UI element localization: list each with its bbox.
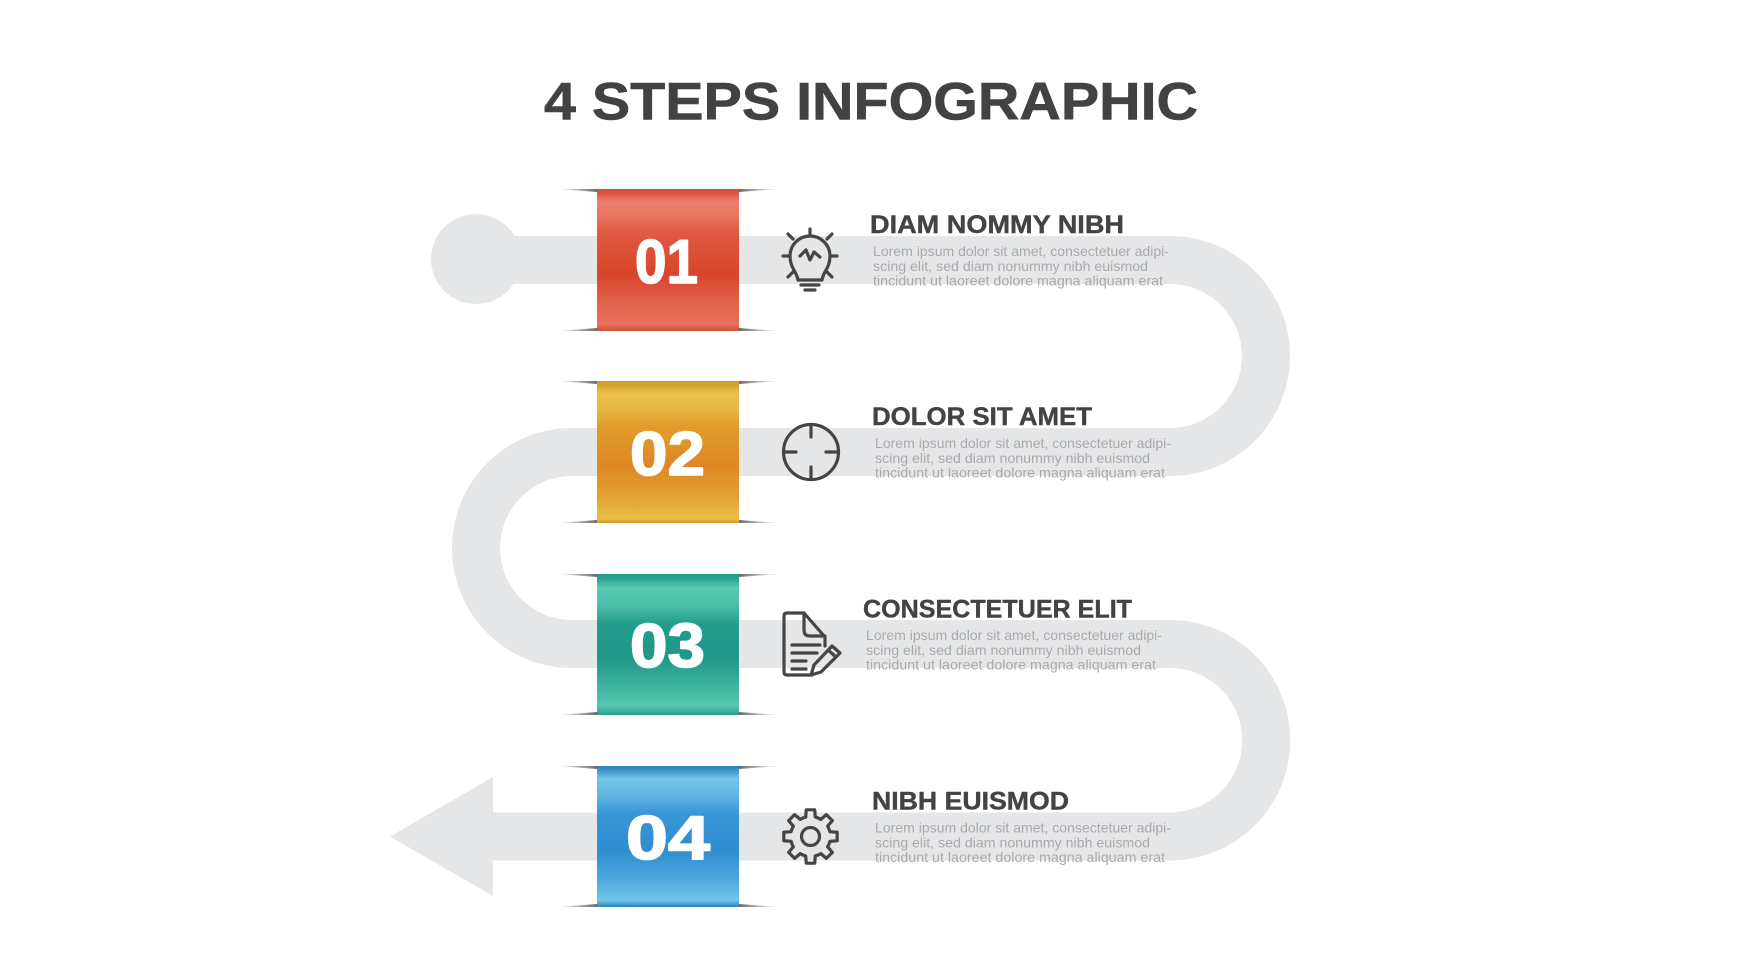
body text 4: scing elit, sed diam nonummy nibh euismod — [875, 834, 1150, 850]
heading: nibh euismod: NIBH EUISMOD — [872, 788, 1069, 816]
body text 1: Lorem ipsum dolor sit amet, consectetuer adipi- — [873, 243, 1169, 259]
heading: consectetuer elit: CONSECTETUER ELIT — [863, 596, 1132, 624]
badge 01: 01 — [635, 228, 698, 297]
body text 1 — [873, 243, 1169, 288]
icon: document with pencil — [784, 613, 840, 675]
icon: gear — [784, 810, 837, 863]
step 2 — [556, 381, 1171, 523]
body text 3: Lorem ipsum dolor sit amet, consectetuer adipi- — [866, 627, 1162, 643]
body text 4 — [875, 820, 1171, 865]
step 4 — [556, 766, 1171, 907]
body text 2: tincidunt ut laoreet dolore magna aliquam erat — [875, 464, 1165, 480]
body text 1: tincidunt ut laoreet dolore magna aliquam erat — [873, 272, 1163, 288]
heading: dolor sit amet: DOLOR SIT AMET — [872, 403, 1092, 431]
badge 04: 04 — [626, 804, 711, 873]
title: 4 STEPS INFOGRAPHIC — [544, 72, 1198, 132]
body text 3 — [866, 627, 1162, 672]
body text 2: Lorem ipsum dolor sit amet, consectetuer adipi- — [875, 435, 1171, 451]
winding road path with start dot and end arrow — [390, 214, 1266, 896]
body text 3: tincidunt ut laoreet dolore magna aliquam erat — [866, 656, 1156, 672]
badge 03 — [556, 574, 780, 715]
badge 03: 03 — [630, 612, 705, 681]
badge 02 — [556, 381, 780, 523]
body text 4: Lorem ipsum dolor sit amet, consectetuer adipi- — [875, 820, 1171, 836]
step 3 — [556, 574, 1162, 715]
badge 04 — [556, 766, 780, 907]
body text 1: scing elit, sed diam nonummy nibh euismod — [873, 258, 1148, 274]
body text 2 — [875, 435, 1171, 480]
badge 01 — [556, 189, 780, 331]
body text 4: tincidunt ut laoreet dolore magna aliquam erat — [875, 849, 1165, 865]
icon: crosshair target — [784, 424, 838, 480]
heading: diam nommy nibh: DIAM NOMMY NIBH — [870, 211, 1124, 239]
icon: light bulb — [783, 229, 837, 290]
badge 02: 02 — [630, 420, 705, 489]
body text 2: scing elit, sed diam nonummy nibh euismod — [875, 450, 1150, 466]
step 1 — [556, 189, 1169, 331]
body text 3: scing elit, sed diam nonummy nibh euismod — [866, 642, 1141, 658]
